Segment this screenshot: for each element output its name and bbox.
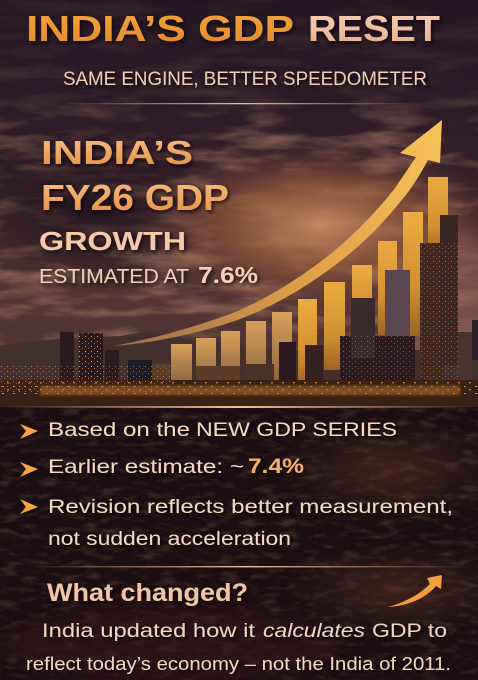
explanation text: India updated how it [42, 621, 256, 642]
bullet: new GDP series: NEW GDP SERIES [196, 419, 397, 441]
headline: FY26 GDP growth [39, 134, 258, 288]
explanation text: GDP to [372, 621, 447, 642]
headline: FY26 GDP growth: 7.6% [198, 262, 258, 288]
heading: what changed: What changed? [47, 579, 248, 607]
title: INDIA’S GDP [26, 8, 294, 49]
headline: FY26 GDP growth: FY26 GDP [41, 177, 229, 218]
bullet list [20, 419, 453, 550]
bullet: new GDP series: Based on the [48, 419, 190, 441]
bullet: revision note: not sudden acceleration [48, 528, 291, 550]
explanation text: calculates [263, 621, 366, 642]
headline: FY26 GDP growth: ESTIMATED AT [39, 266, 189, 288]
bullet: earlier estimate: 7.4% [248, 455, 304, 478]
bullet: new GDP series [20, 419, 397, 441]
title [26, 8, 440, 49]
explanation text [26, 621, 451, 674]
bullet: revision note [20, 496, 453, 550]
city buildings [60, 215, 478, 398]
waterfront [0, 364, 478, 407]
bar chart [171, 177, 448, 387]
bullet: earlier estimate [20, 455, 304, 478]
bullet: earlier estimate: Earlier estimate: ~ [48, 456, 244, 478]
icon: small rising arrow [388, 575, 442, 607]
title: RESET [308, 8, 440, 49]
distant hills [0, 331, 478, 400]
explanation text: reflect today’s economy – not the India of 2011. [26, 654, 451, 674]
city lights [79, 243, 458, 398]
bullet: revision note: Revision reflects better measurement, [48, 496, 453, 518]
headline: FY26 GDP growth: GROWTH [39, 226, 186, 256]
headline: FY26 GDP growth: INDIA’S [41, 134, 193, 171]
chart: skyline with rising bars [0, 177, 478, 407]
subtitle: SAME ENGINE, BETTER SPEEDOMETER [63, 68, 427, 90]
growth arrow [113, 120, 442, 346]
